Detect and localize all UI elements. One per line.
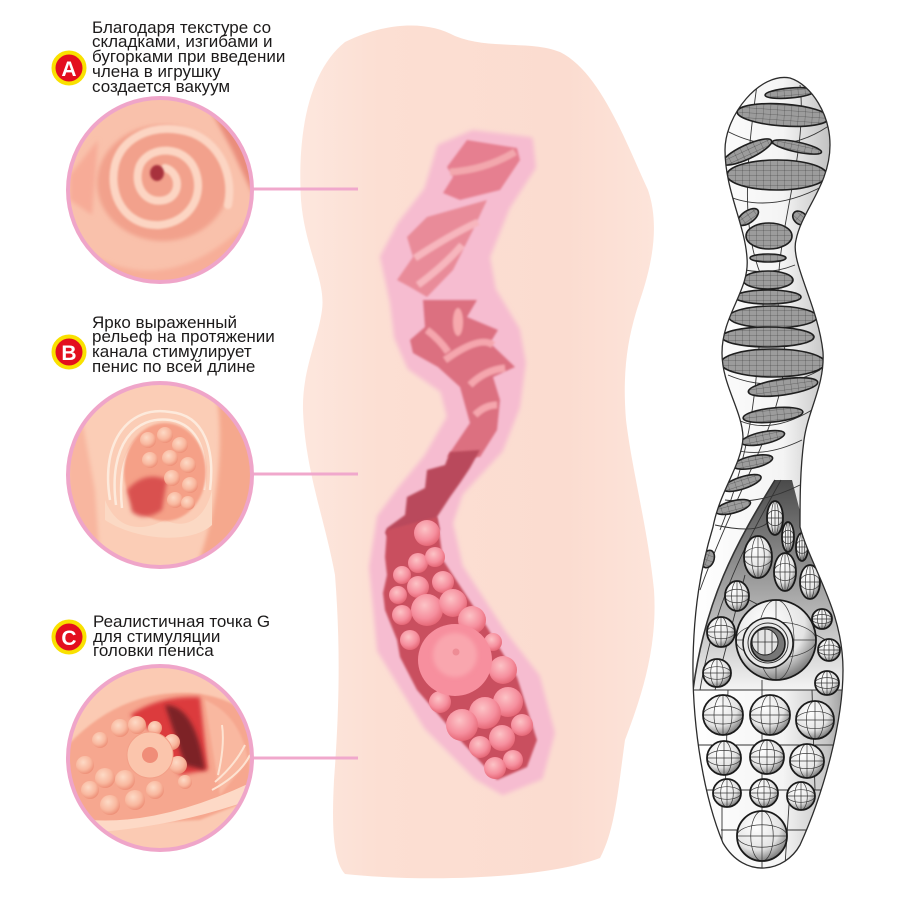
text A: Благодаря текстуре со [92,18,271,37]
text A: складками, изгибами и [92,32,273,51]
text B: пенис по всей длине [92,357,255,376]
text A: создается вакуум [92,77,230,96]
label A [54,52,84,84]
product body silhouette [300,25,655,878]
label A: A [61,58,77,81]
text B [92,313,275,376]
text C: Реалистичная точка G [93,612,270,631]
jagged channel [385,450,480,545]
label B: B [61,342,77,365]
upper fold 2 [397,200,487,297]
grid lines [693,85,845,880]
callout lines [250,189,358,758]
text C: головки пениса [93,641,214,660]
upper fold 1 [443,140,520,200]
twisted bands [699,86,830,570]
sphere dimples [703,501,840,861]
wireframe wand [693,77,845,880]
text B: канала стимулирует [92,342,252,361]
central dimple [743,618,793,668]
central nodule [418,624,492,696]
label B [54,336,84,368]
text B: Ярко выраженный [92,313,237,332]
detail circle B [68,383,255,570]
lower cavity [383,517,537,780]
bumps [389,520,533,779]
label C: C [61,627,77,650]
label C [54,622,84,652]
middle fold [410,300,515,457]
detail circle A [68,98,253,290]
canal cross-section [372,133,552,792]
text B: рельеф на протяжении [92,327,275,346]
canal sheath [372,133,552,792]
text C [93,612,270,660]
text A: бугорками при введении [92,47,285,66]
wedge panel [693,480,843,690]
text C: для стимуляции [93,627,220,646]
text A [92,18,285,96]
detail circle C [68,666,252,850]
text A: члена в игрушку [92,62,221,81]
